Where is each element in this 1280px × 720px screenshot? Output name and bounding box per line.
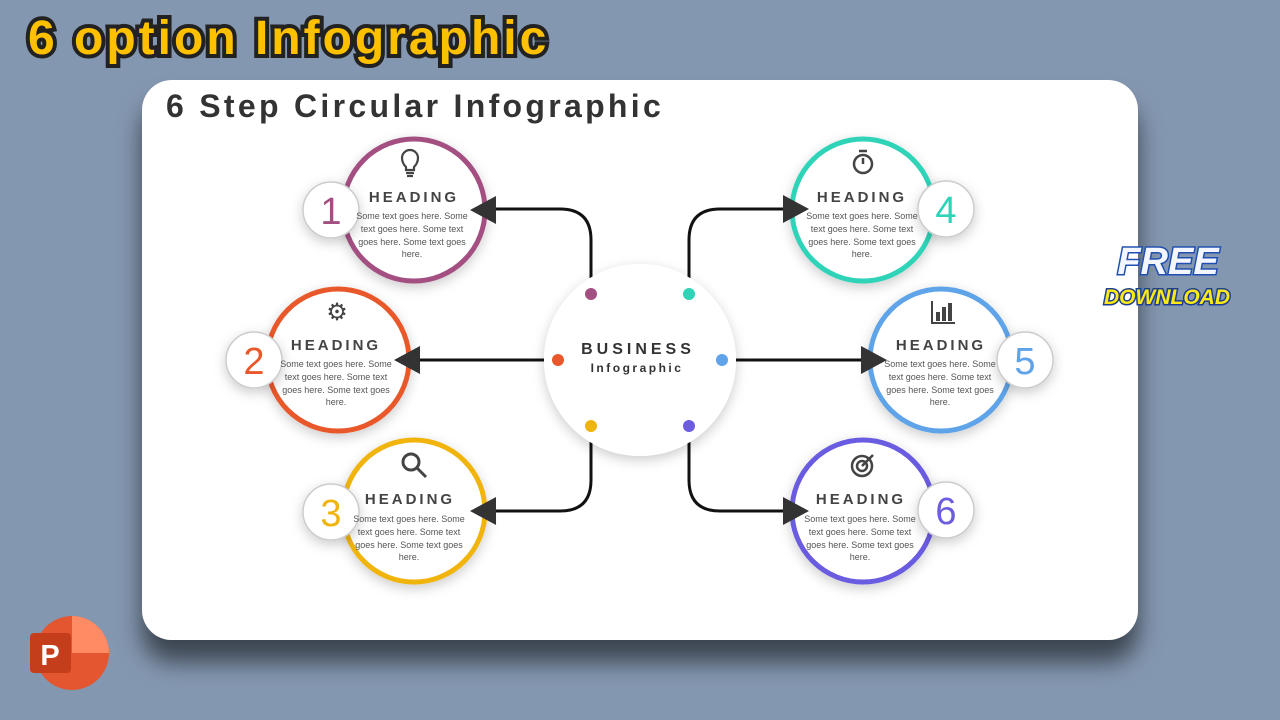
circle 1: text goes here. Some text bbox=[361, 224, 464, 234]
center circle: BUSINESS bbox=[581, 341, 695, 358]
circle 4: here. bbox=[852, 249, 872, 259]
circle 1: HEADING bbox=[369, 189, 459, 206]
circle 2: ⚙ bbox=[326, 299, 348, 326]
circle 4 bbox=[783, 139, 974, 281]
circle 1: Some text goes here. Some bbox=[356, 211, 468, 221]
circle 5: HEADING bbox=[896, 337, 986, 354]
circle 6: here. bbox=[850, 552, 870, 562]
circle 1: 1 bbox=[320, 191, 342, 233]
connectors bbox=[410, 209, 870, 511]
circle 6: goes here. Some text goes bbox=[806, 540, 914, 550]
circle 1: here. bbox=[402, 249, 422, 259]
circle 5: text goes here. Some text bbox=[889, 372, 992, 382]
subtitle: 6 Step Circular Infographic bbox=[166, 88, 664, 124]
circle 2: here. bbox=[326, 397, 346, 407]
icon: lightbulb bbox=[402, 150, 418, 176]
circle 1 bbox=[303, 139, 496, 281]
icon: powerpoint logo: P bbox=[40, 640, 60, 672]
icon: magnifier bbox=[403, 454, 426, 477]
circle 6: Some text goes here. Some bbox=[804, 514, 916, 524]
center circle bbox=[544, 264, 736, 456]
panel: card bbox=[142, 80, 1138, 640]
circle 6 bbox=[783, 440, 974, 582]
circle 5: Some text goes here. Some bbox=[884, 359, 996, 369]
circle 3: text goes here. Some text bbox=[358, 527, 461, 537]
circle 4: goes here. Some text goes bbox=[808, 237, 916, 247]
circle 2: goes here. Some text goes bbox=[282, 385, 390, 395]
circle 2 bbox=[226, 289, 420, 431]
circle 5: here. bbox=[930, 397, 950, 407]
circle 4: HEADING bbox=[817, 189, 907, 206]
circle 4: Some text goes here. Some bbox=[806, 211, 918, 221]
circle 5 bbox=[861, 289, 1053, 431]
circle 2: 2 bbox=[243, 341, 265, 383]
icon: powerpoint logo bbox=[30, 616, 109, 690]
circle 6: HEADING bbox=[816, 491, 906, 508]
circle 6: 6 bbox=[935, 491, 957, 533]
title: 6 option Infographic bbox=[28, 12, 549, 65]
badge: free download: FREE bbox=[1117, 241, 1220, 283]
circle 4: text goes here. Some text bbox=[811, 224, 914, 234]
circle 5: goes here. Some text goes bbox=[886, 385, 994, 395]
circle 5: 5 bbox=[1014, 341, 1036, 383]
circle 3 bbox=[303, 440, 496, 582]
badge: free download: DOWNLOAD bbox=[1104, 286, 1230, 309]
circle 2: Some text goes here. Some bbox=[280, 359, 392, 369]
circle 3: 3 bbox=[320, 493, 342, 535]
badge: free download bbox=[1104, 241, 1230, 309]
circle 1: goes here. Some text goes bbox=[358, 237, 466, 247]
circle 3: HEADING bbox=[365, 491, 455, 508]
circle 2: HEADING bbox=[291, 337, 381, 354]
circle 4: 4 bbox=[935, 190, 957, 232]
circle 3: Some text goes here. Some bbox=[353, 514, 465, 524]
circle 3: goes here. Some text goes bbox=[355, 540, 463, 550]
circle 3: here. bbox=[399, 552, 419, 562]
circle 2: text goes here. Some text bbox=[285, 372, 388, 382]
circle 6: text goes here. Some text bbox=[809, 527, 912, 537]
center circle: Infographic bbox=[591, 361, 683, 375]
